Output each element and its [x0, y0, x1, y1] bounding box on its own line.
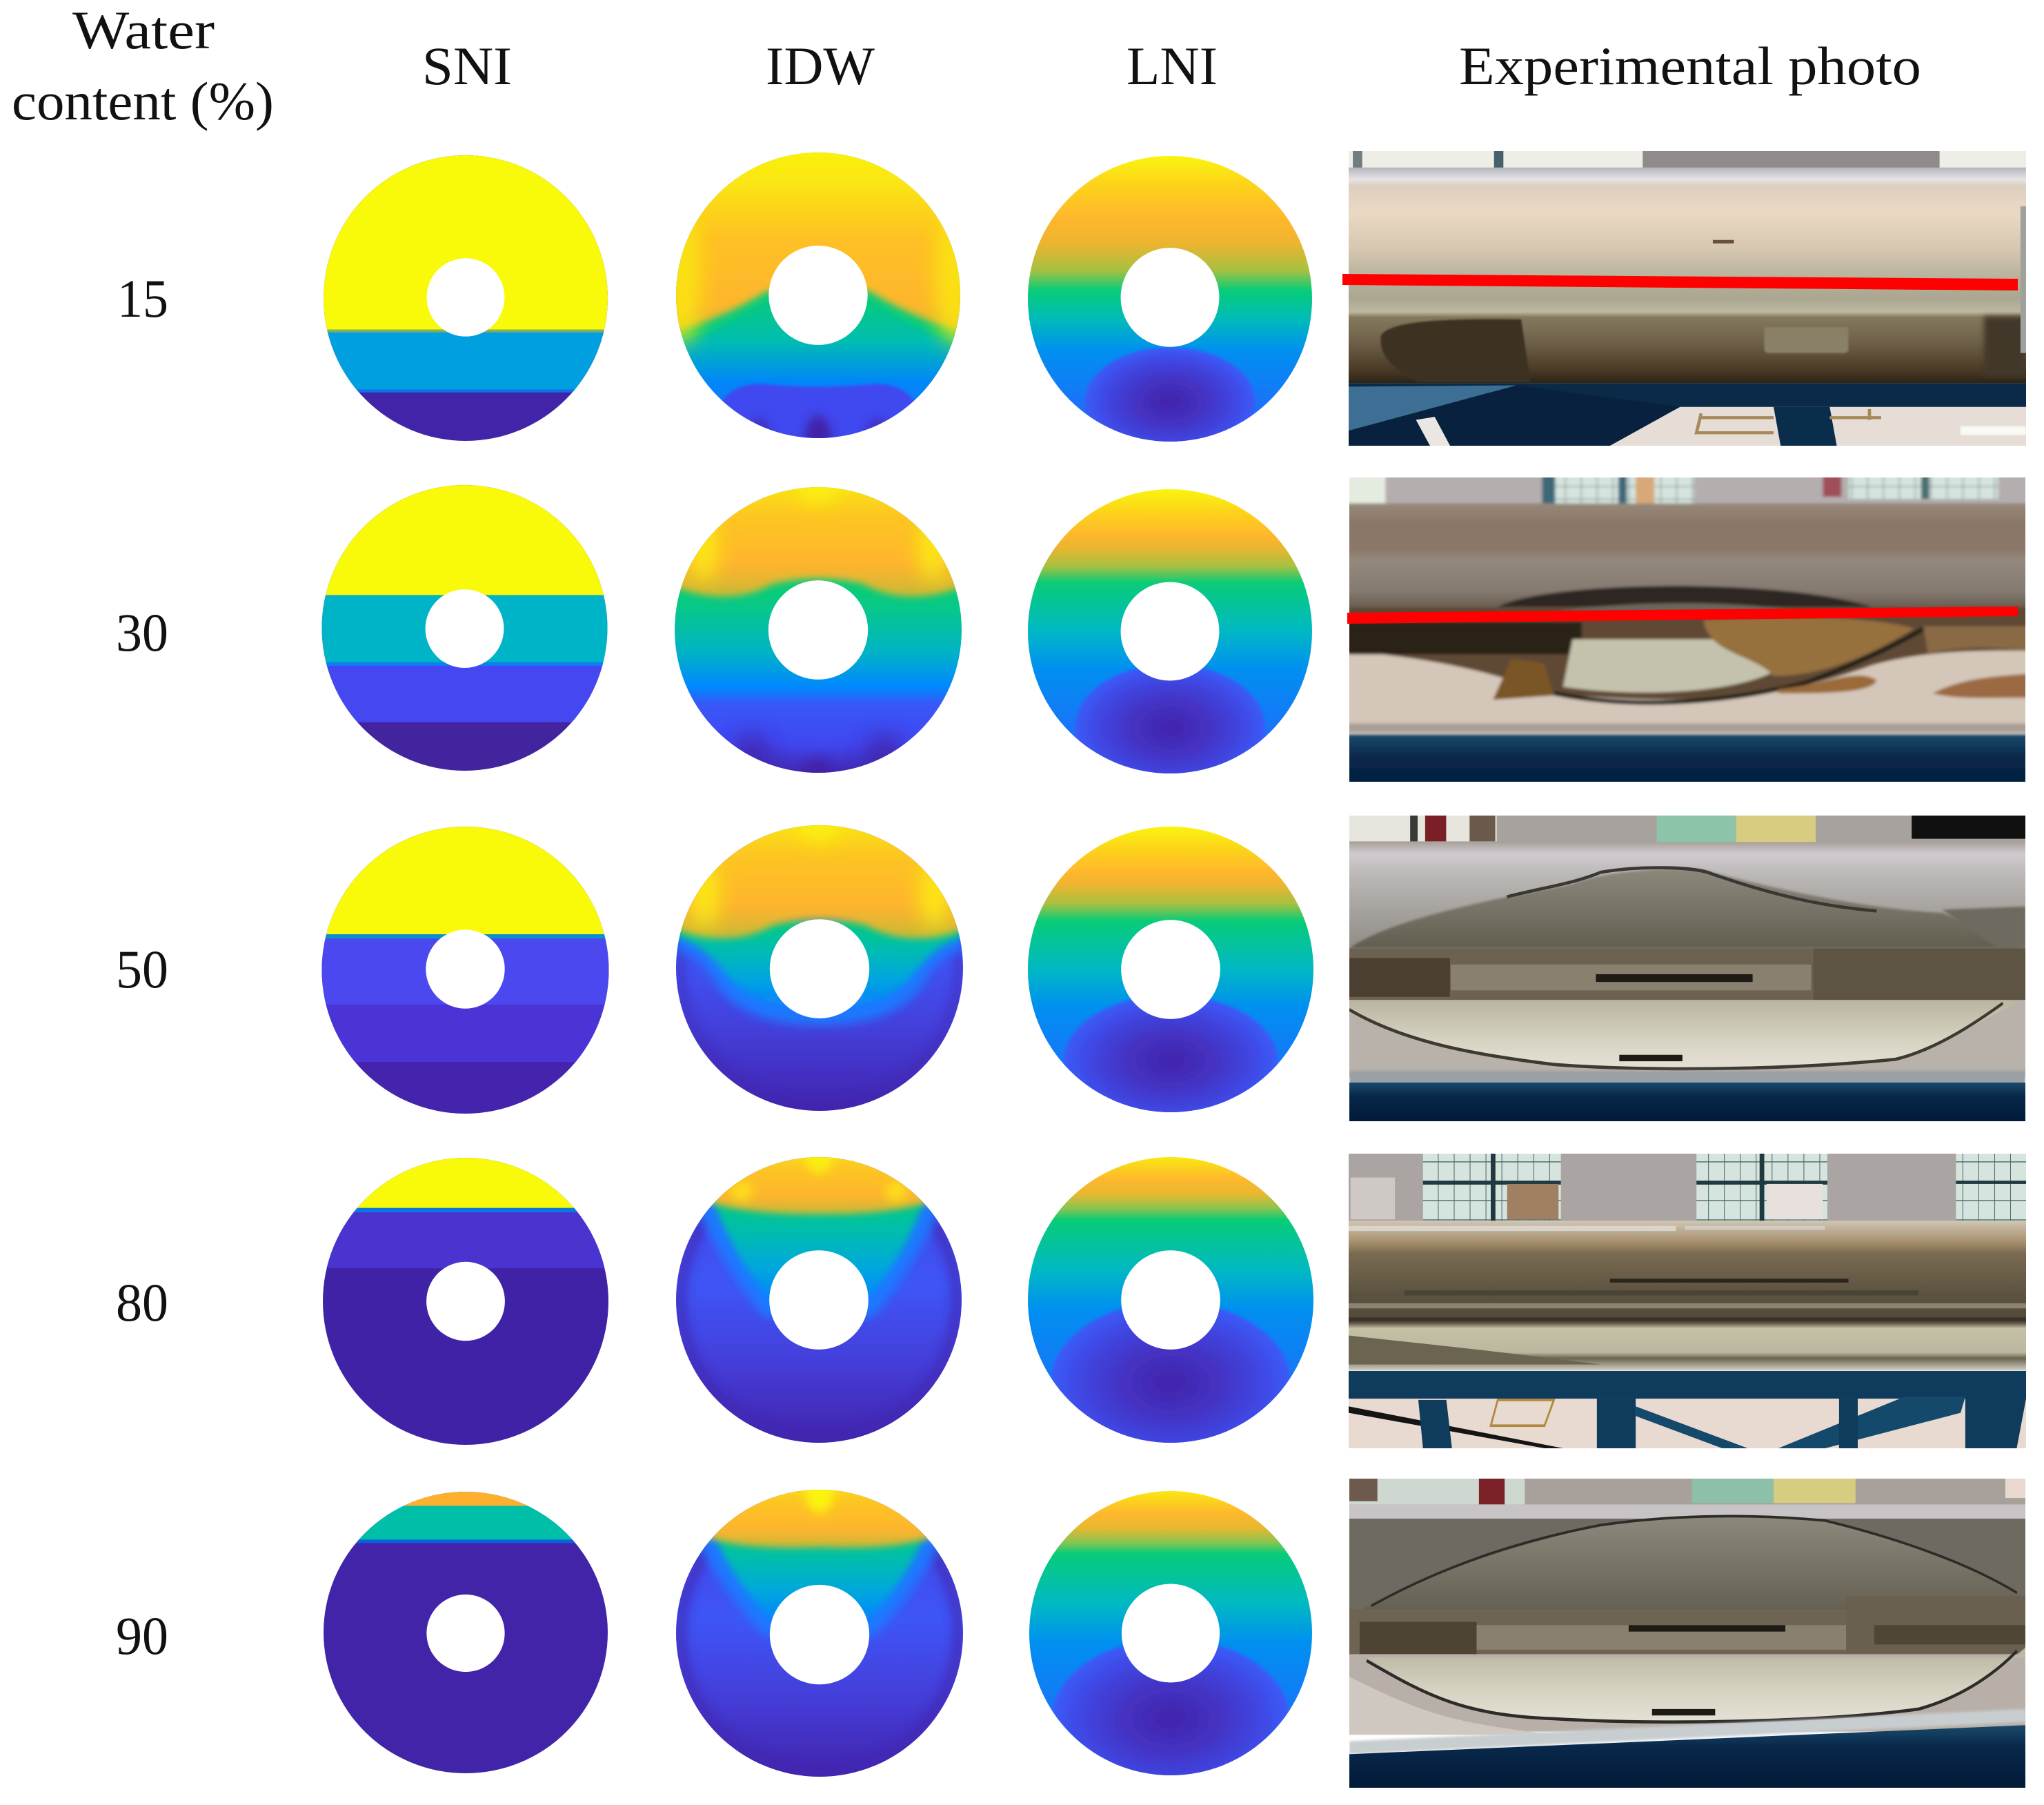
- heading: water content: content (%): [12, 71, 274, 131]
- SNI ring at 15%: [324, 155, 608, 441]
- LNI ring at 90%: [1029, 1491, 1312, 1798]
- row label: 80: 80: [116, 1272, 168, 1332]
- column: SNI contour maps: [321, 155, 608, 1773]
- SNI ring at 30%: [321, 485, 607, 771]
- row label: 90: 90: [116, 1606, 168, 1666]
- IDW ring at 50%: [676, 825, 963, 1111]
- SNI ring at 90%: [324, 1492, 608, 1773]
- photo: 50% water content: [1349, 816, 2025, 1121]
- IDW ring at 80%: [676, 1157, 962, 1443]
- photo: 15% water content: [1349, 151, 2026, 446]
- red line: oil-water level at 30%: [1347, 606, 2018, 624]
- IDW ring at 30%: [675, 487, 962, 773]
- column: IDW contour maps: [660, 138, 978, 1777]
- IDW ring at 15%: [676, 152, 960, 438]
- row label: 50: 50: [116, 939, 168, 999]
- heading: SNI: SNI: [422, 36, 512, 96]
- heading: IDW: IDW: [766, 36, 875, 96]
- IDW ring at 90%: [676, 1490, 963, 1777]
- photo: 90% water content: [1349, 1479, 2025, 1788]
- column: LNI contour maps: [1028, 156, 1313, 1798]
- heading: LNI: LNI: [1127, 36, 1218, 96]
- heading: water content: [12, 0, 274, 131]
- red line: oil-water level at 15%: [1342, 274, 2018, 290]
- row label: 15: 15: [117, 268, 168, 328]
- LNI ring at 15%: [1028, 156, 1312, 456]
- LNI ring at 80%: [1028, 1157, 1313, 1464]
- LNI ring at 50%: [1028, 827, 1313, 1127]
- SNI ring at 80%: [323, 1158, 608, 1445]
- photo: 80% water content: [1349, 1154, 2026, 1448]
- row label: 30: 30: [116, 602, 168, 662]
- LNI ring at 30%: [1028, 489, 1312, 792]
- heading: experimental photo: Experimental photo: [1459, 36, 1921, 96]
- photo: 30% water content: [1349, 477, 2025, 782]
- heading: water content: Water: [72, 0, 215, 60]
- SNI ring at 50%: [321, 827, 608, 1114]
